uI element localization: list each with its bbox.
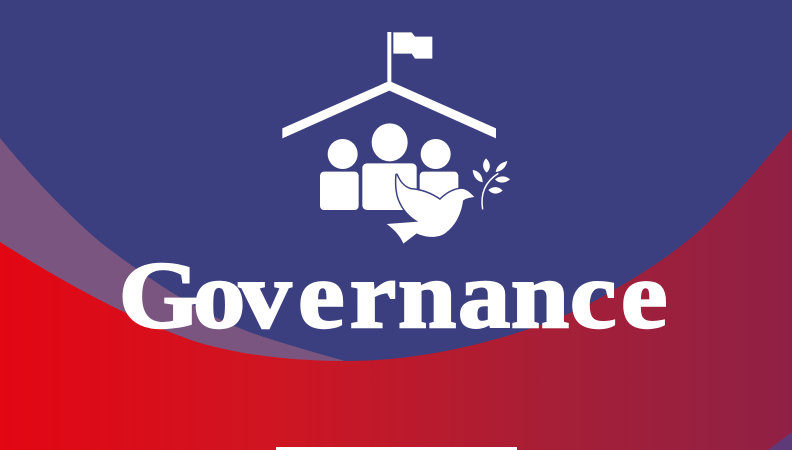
icon: olive branch (473, 158, 510, 209)
corner: purple accent (768, 432, 792, 450)
title: Governance: Governance (119, 242, 667, 348)
icon: three people (320, 123, 458, 210)
band: mauve swoosh (0, 138, 345, 361)
icon: dove (387, 175, 474, 244)
icon: governance house with people and dove (282, 32, 510, 244)
icon: flag (387, 32, 432, 82)
band: red gradient wave (0, 128, 792, 450)
bottom white bar (276, 447, 517, 450)
icon: roof (282, 81, 496, 138)
